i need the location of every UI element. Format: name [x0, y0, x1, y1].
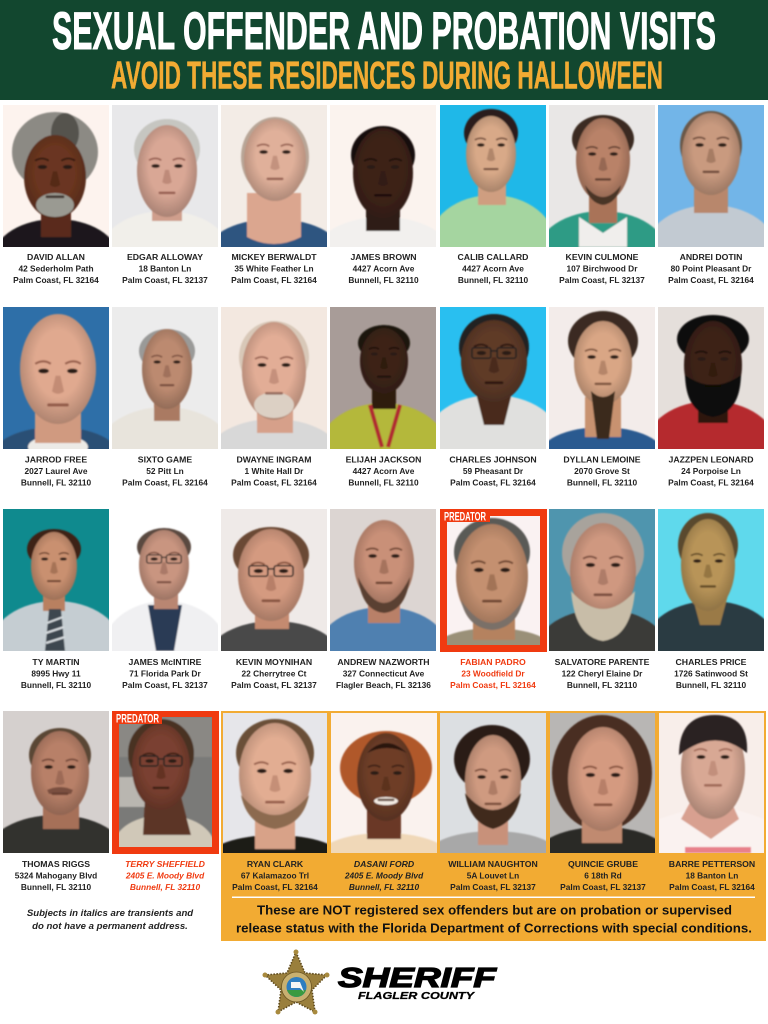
note: probation statement: These are NOT registered sex offenders but are on probation or supervised — [257, 902, 732, 918]
captions: row 4: Palm Coast, FL 32137 — [450, 882, 536, 892]
captions: row 4: 2405 E. Moody Blvd — [344, 870, 424, 880]
portrait: Thomas Riggs — [3, 711, 109, 853]
captions: row 3: Palm Coast, FL 32137 — [122, 680, 208, 690]
portrait: Ty Martin — [3, 509, 109, 651]
portrait: Terry Sheffield (predator frame) — [112, 711, 219, 875]
predator tag — [440, 509, 490, 524]
portrait: William Naughton — [440, 713, 546, 853]
captions: row 1: 107 Birchwood Dr — [567, 264, 638, 274]
captions: row 2: Bunnell, FL 32110 — [348, 478, 419, 488]
captions: row 4: 18 Banton Ln — [686, 870, 738, 880]
note: probation statement — [232, 896, 755, 936]
captions: row 1: Palm Coast, FL 32164 — [231, 275, 317, 285]
portrait: Calib Callard — [440, 105, 546, 247]
portrait: Dasani Ford — [331, 713, 437, 853]
captions: row 2: Bunnell, FL 32110 — [21, 478, 92, 488]
captions: row 2: Bunnell, FL 32110 — [567, 478, 638, 488]
captions: row 3: Bunnell, FL 32110 — [676, 680, 747, 690]
captions: row 2: 2070 Grove St — [574, 466, 630, 476]
predator tag: PREDATOR — [444, 510, 486, 524]
captions: row 3: 71 Florida Park Dr — [129, 668, 201, 678]
portrait: Salvatore Parente — [549, 509, 655, 651]
portrait: Jazzpen Leonard — [658, 307, 764, 449]
portrait: James McIntire — [112, 526, 218, 651]
captions: row 3: Palm Coast, FL 32137 — [231, 680, 317, 690]
header banner — [0, 0, 768, 100]
captions: row 1: 4427 Acorn Ave — [353, 264, 415, 274]
captions: row 2: Palm Coast, FL 32164 — [231, 478, 317, 488]
captions: row 4: Palm Coast, FL 32164 — [669, 882, 755, 892]
captions: row 3: SALVATORE PARENTE — [555, 657, 650, 667]
note: italics explanation — [27, 908, 194, 932]
logo: sheriff wordmark — [338, 962, 497, 1002]
captions: row 1: Palm Coast, FL 32137 — [122, 275, 208, 285]
captions: row 1: KEVIN CULMONE — [566, 252, 639, 262]
captions: row 3: 1726 Satinwood St — [674, 668, 748, 678]
portrait: Sixto Game — [112, 307, 218, 449]
portrait: Charles Johnson — [440, 307, 546, 449]
captions: row 2: CHARLES JOHNSON — [449, 454, 537, 464]
captions: row 1: CALIB CALLARD — [458, 252, 528, 262]
captions: row 3 — [21, 657, 748, 690]
portrait: Barre Petterson — [659, 713, 764, 853]
captions: row 2: 59 Pheasant Dr — [463, 466, 524, 476]
captions: row 1: MICKEY BERWALDT — [231, 252, 317, 262]
captions: row 1 — [13, 252, 754, 285]
captions: row 4: TERRY SHEFFIELD — [125, 859, 206, 869]
captions: row 3: JAMES McINTIRE — [129, 657, 202, 667]
captions: row 1: DAVID ALLAN — [27, 252, 85, 262]
captions: row 2: Palm Coast, FL 32164 — [122, 478, 208, 488]
captions: row 1: ANDREI DOTIN — [680, 252, 742, 262]
captions: row 1: 4427 Acorn Ave — [462, 264, 524, 274]
portrait: Kevin Culmone — [549, 105, 655, 247]
captions: row 4: QUINCIE GRUBE — [568, 859, 638, 869]
captions: row 3: FABIAN PADRO — [460, 657, 526, 667]
captions: row 4: Bunnell, FL 32110 — [130, 882, 200, 892]
portrait: Edgar Alloway — [112, 105, 218, 247]
portrait: Mickey Berwaldt — [221, 105, 327, 247]
captions: row 4: 5324 Mahogany Blvd — [15, 870, 97, 880]
captions: row 3: 8995 Hwy 11 — [31, 668, 81, 678]
captions: row 1: Bunnell, FL 32110 — [348, 275, 419, 285]
captions: row 3: TY MARTIN — [32, 657, 80, 667]
captions: row 3: 23 Woodfield Dr — [461, 668, 525, 678]
portrait: Charles Price — [658, 509, 764, 651]
portrait: Andrew Nazworth — [330, 509, 436, 651]
captions: row 4: BARRE PETTERSON — [669, 859, 755, 869]
captions: row 2 — [21, 454, 754, 488]
captions: row 3: Flagler Beach, FL 32136 — [336, 680, 431, 690]
captions: row 1: EDGAR ALLOWAY — [127, 252, 203, 262]
portrait: James Brown — [330, 105, 436, 247]
captions: row 3: Palm Coast, FL 32164 — [450, 680, 536, 690]
captions: row 1: Palm Coast, FL 32164 — [13, 275, 99, 285]
captions: row 4: DASANI FORD — [354, 859, 415, 869]
portrait: Dwayne Ingram — [221, 307, 327, 449]
portrait: Jarrod Free — [3, 307, 109, 449]
captions: row 4: 6 18th Rd — [584, 870, 622, 880]
logo: sheriff wordmark: SHERIFF — [338, 962, 497, 993]
captions: row 3: 122 Cheryl Elaine Dr — [562, 668, 643, 678]
captions: row 4: Bunnell, FL 32110 — [349, 882, 419, 892]
captions: row 4: Bunnell, FL 32110 — [21, 882, 92, 892]
captions: row 3: KEVIN MOYNIHAN — [236, 657, 312, 667]
captions: row 2: Palm Coast, FL 32164 — [668, 478, 754, 488]
captions: row 3: Bunnell, FL 32110 — [21, 680, 92, 690]
captions: row 4: 2405 E. Moody Blvd — [125, 870, 205, 880]
captions: row 1: Bunnell, FL 32110 — [458, 275, 529, 285]
logo: sheriff star badge — [262, 950, 330, 1014]
captions: row 2: 24 Porpoise Ln — [681, 466, 741, 476]
captions: row 2: JAZZPEN LEONARD — [669, 454, 753, 464]
captions: row 4: RYAN CLARK — [247, 859, 304, 869]
portrait: Dyllan Lemoine — [549, 307, 655, 449]
captions: row 2: 52 Pitt Ln — [146, 466, 184, 476]
captions: row 1: Palm Coast, FL 32164 — [668, 275, 754, 285]
note: italics explanation: do not have a permanent address. — [32, 921, 188, 932]
captions: row 4 — [15, 859, 755, 892]
note: probation statement: release status with the Florida Department of Corrections with special conditions. — [236, 920, 752, 936]
portrait: Andrei Dotin — [658, 105, 764, 247]
note: italics explanation: Subjects in italics are transients and — [27, 908, 194, 919]
panel: orange probation group background — [221, 711, 766, 941]
captions: row 1: 18 Banton Ln — [139, 264, 191, 274]
captions: row 2: ELIJAH JACKSON — [346, 454, 421, 464]
captions: row 1: Palm Coast, FL 32137 — [559, 275, 645, 285]
captions: row 1: 42 Sederholm Path — [18, 264, 94, 274]
captions: row 1: JAMES BROWN — [350, 252, 417, 262]
captions: row 3: CHARLES PRICE — [676, 657, 747, 667]
portrait: David Allan — [3, 105, 109, 247]
captions: row 4: WILLIAM NAUGHTON — [448, 859, 538, 869]
portrait: Quincie Grube — [550, 713, 655, 853]
captions: row 4: 5A Louvet Ln — [467, 870, 519, 880]
captions: row 2: 2027 Laurel Ave — [25, 466, 88, 476]
portrait: Elijah Jackson — [330, 307, 436, 449]
captions: row 3: 327 Connecticut Ave — [343, 668, 425, 678]
predator tag — [112, 711, 162, 726]
captions: row 2: DYLLAN LEMOINE — [563, 454, 641, 464]
portrait: Ryan Clark — [223, 713, 327, 853]
portrait: Kevin Moynihan — [221, 509, 327, 651]
captions: row 3: 22 Cherrytree Ct — [242, 668, 307, 678]
captions: row 4: Palm Coast, FL 32164 — [232, 882, 318, 892]
captions: row 2: SIXTO GAME — [138, 454, 192, 464]
captions: row 4: THOMAS RIGGS — [22, 859, 90, 869]
captions: row 2: JARROD FREE — [25, 454, 87, 464]
captions: row 2: 4427 Acorn Ave — [353, 466, 415, 476]
captions: row 2: DWAYNE INGRAM — [237, 454, 311, 464]
predator tag: PREDATOR — [116, 712, 159, 726]
portrait: Fabian Padro (predator frame) — [431, 509, 555, 676]
captions: row 4: 67 Kalamazoo Trl — [241, 870, 309, 880]
captions: row 2: 1 White Hall Dr — [245, 466, 304, 476]
logo: sheriff wordmark: FLAGLER COUNTY — [358, 990, 475, 1002]
captions: row 1: 35 White Feather Ln — [234, 264, 314, 274]
captions: row 4: Palm Coast, FL 32137 — [560, 882, 646, 892]
captions: row 1: 80 Point Pleasant Dr — [671, 264, 752, 274]
captions: row 3: ANDREW NAZWORTH — [337, 657, 430, 667]
captions: row 2: Palm Coast, FL 32164 — [450, 478, 536, 488]
captions: row 3: Bunnell, FL 32110 — [567, 680, 638, 690]
